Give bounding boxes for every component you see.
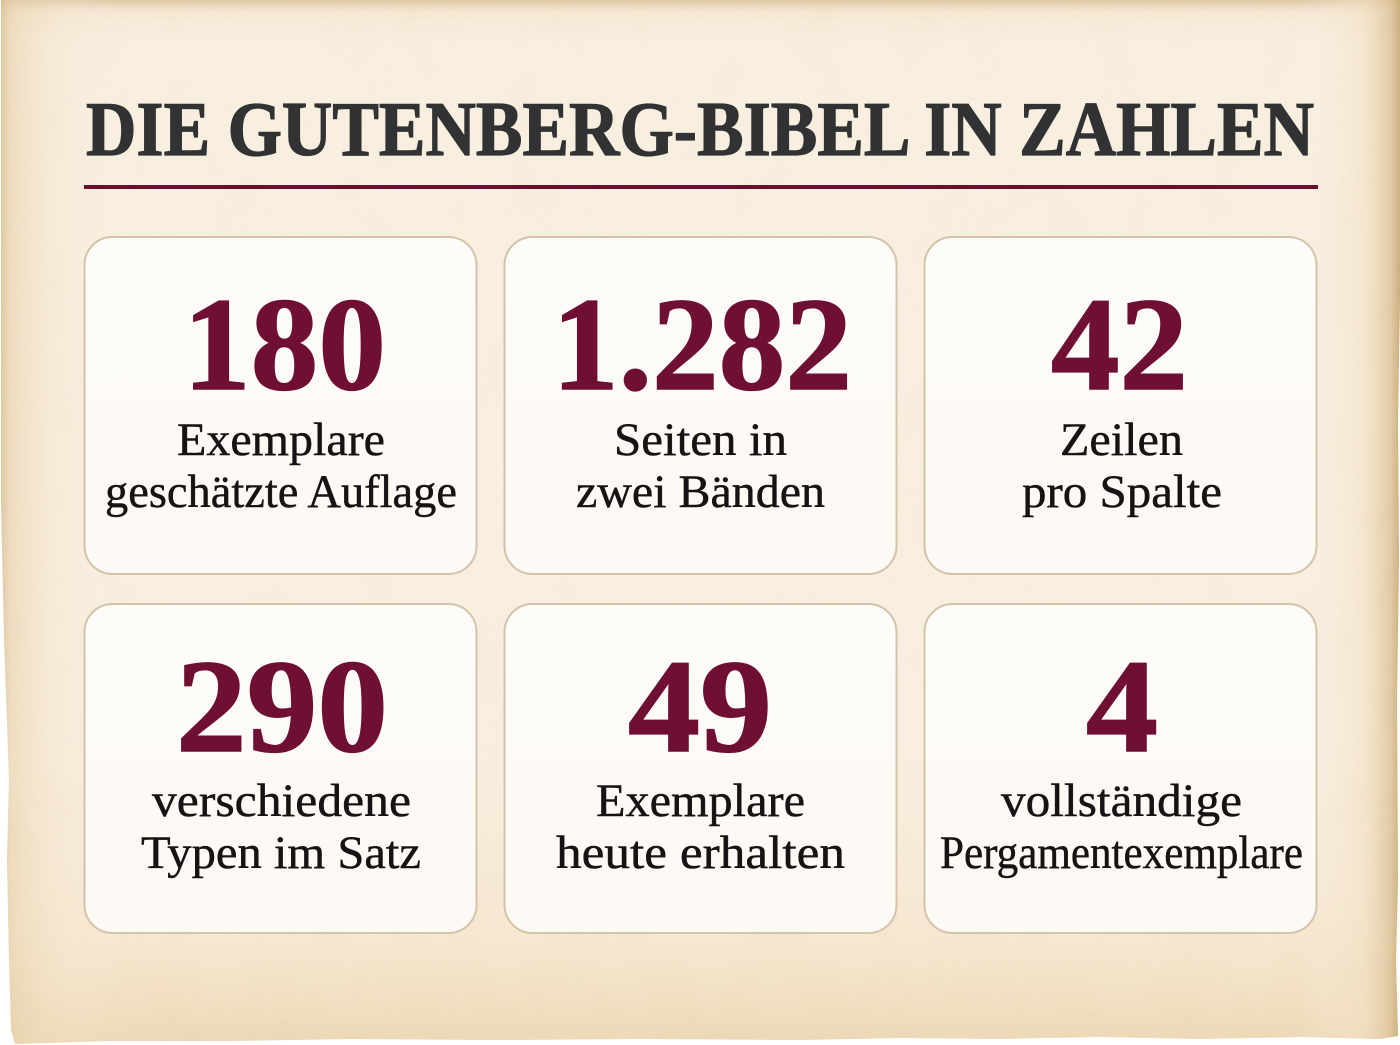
number: 42: 42 (1051, 270, 1188, 418)
title divider (84, 185, 1318, 189)
card: 290 Typen (84, 604, 476, 933)
card: 42 Zeilen (924, 237, 1316, 574)
label: Exemplare heute erhalten (556, 775, 845, 879)
number: 180: 180 (183, 270, 386, 418)
label: Zeilen pro Spalte: pro Spalte (1022, 466, 1222, 518)
label: vollständige Pergamentexemplare: vollständige (1001, 775, 1242, 827)
label: verschiedene Typen im Satz (141, 775, 421, 879)
number: 290: 290 (176, 632, 388, 780)
card: 180 Exemplare (84, 237, 476, 574)
label: vollständige Pergamentexemplare (940, 775, 1303, 879)
label: vollständige Pergamentexemplare: Pergamentexemplare (940, 827, 1303, 879)
label: Exemplare geschätzte Auflage (105, 414, 457, 518)
number: 4: 4 (1086, 632, 1158, 780)
card: 4 Pergamentexemplare (924, 604, 1316, 933)
label: Seiten in zwei Bänden (576, 414, 825, 518)
number: 1.282: 1.282 (552, 270, 852, 418)
label: Seiten in zwei Bänden: zwei Bänden (576, 466, 825, 518)
label: verschiedene Typen im Satz: Typen im Satz (141, 827, 421, 879)
title: DIE GUTENBERG-BIBEL IN ZAHLEN (86, 86, 1314, 172)
label: Zeilen pro Spalte (1022, 414, 1222, 518)
label: Exemplare geschätzte Auflage: Exemplare (177, 414, 385, 466)
label: Exemplare geschätzte Auflage: geschätzte Auflage (105, 466, 457, 518)
label: Exemplare heute erhalten: Exemplare (596, 775, 805, 827)
label: Zeilen pro Spalte: Zeilen (1060, 414, 1183, 466)
label: verschiedene Typen im Satz: verschiedene (152, 775, 411, 827)
number: 49: 49 (628, 632, 772, 780)
card: 49 Exemplare (504, 604, 896, 933)
card: 1.282 Seiten (504, 237, 896, 574)
label: Exemplare heute erhalten: heute erhalten (556, 827, 845, 879)
label: Seiten in zwei Bänden: Seiten in (614, 414, 787, 466)
